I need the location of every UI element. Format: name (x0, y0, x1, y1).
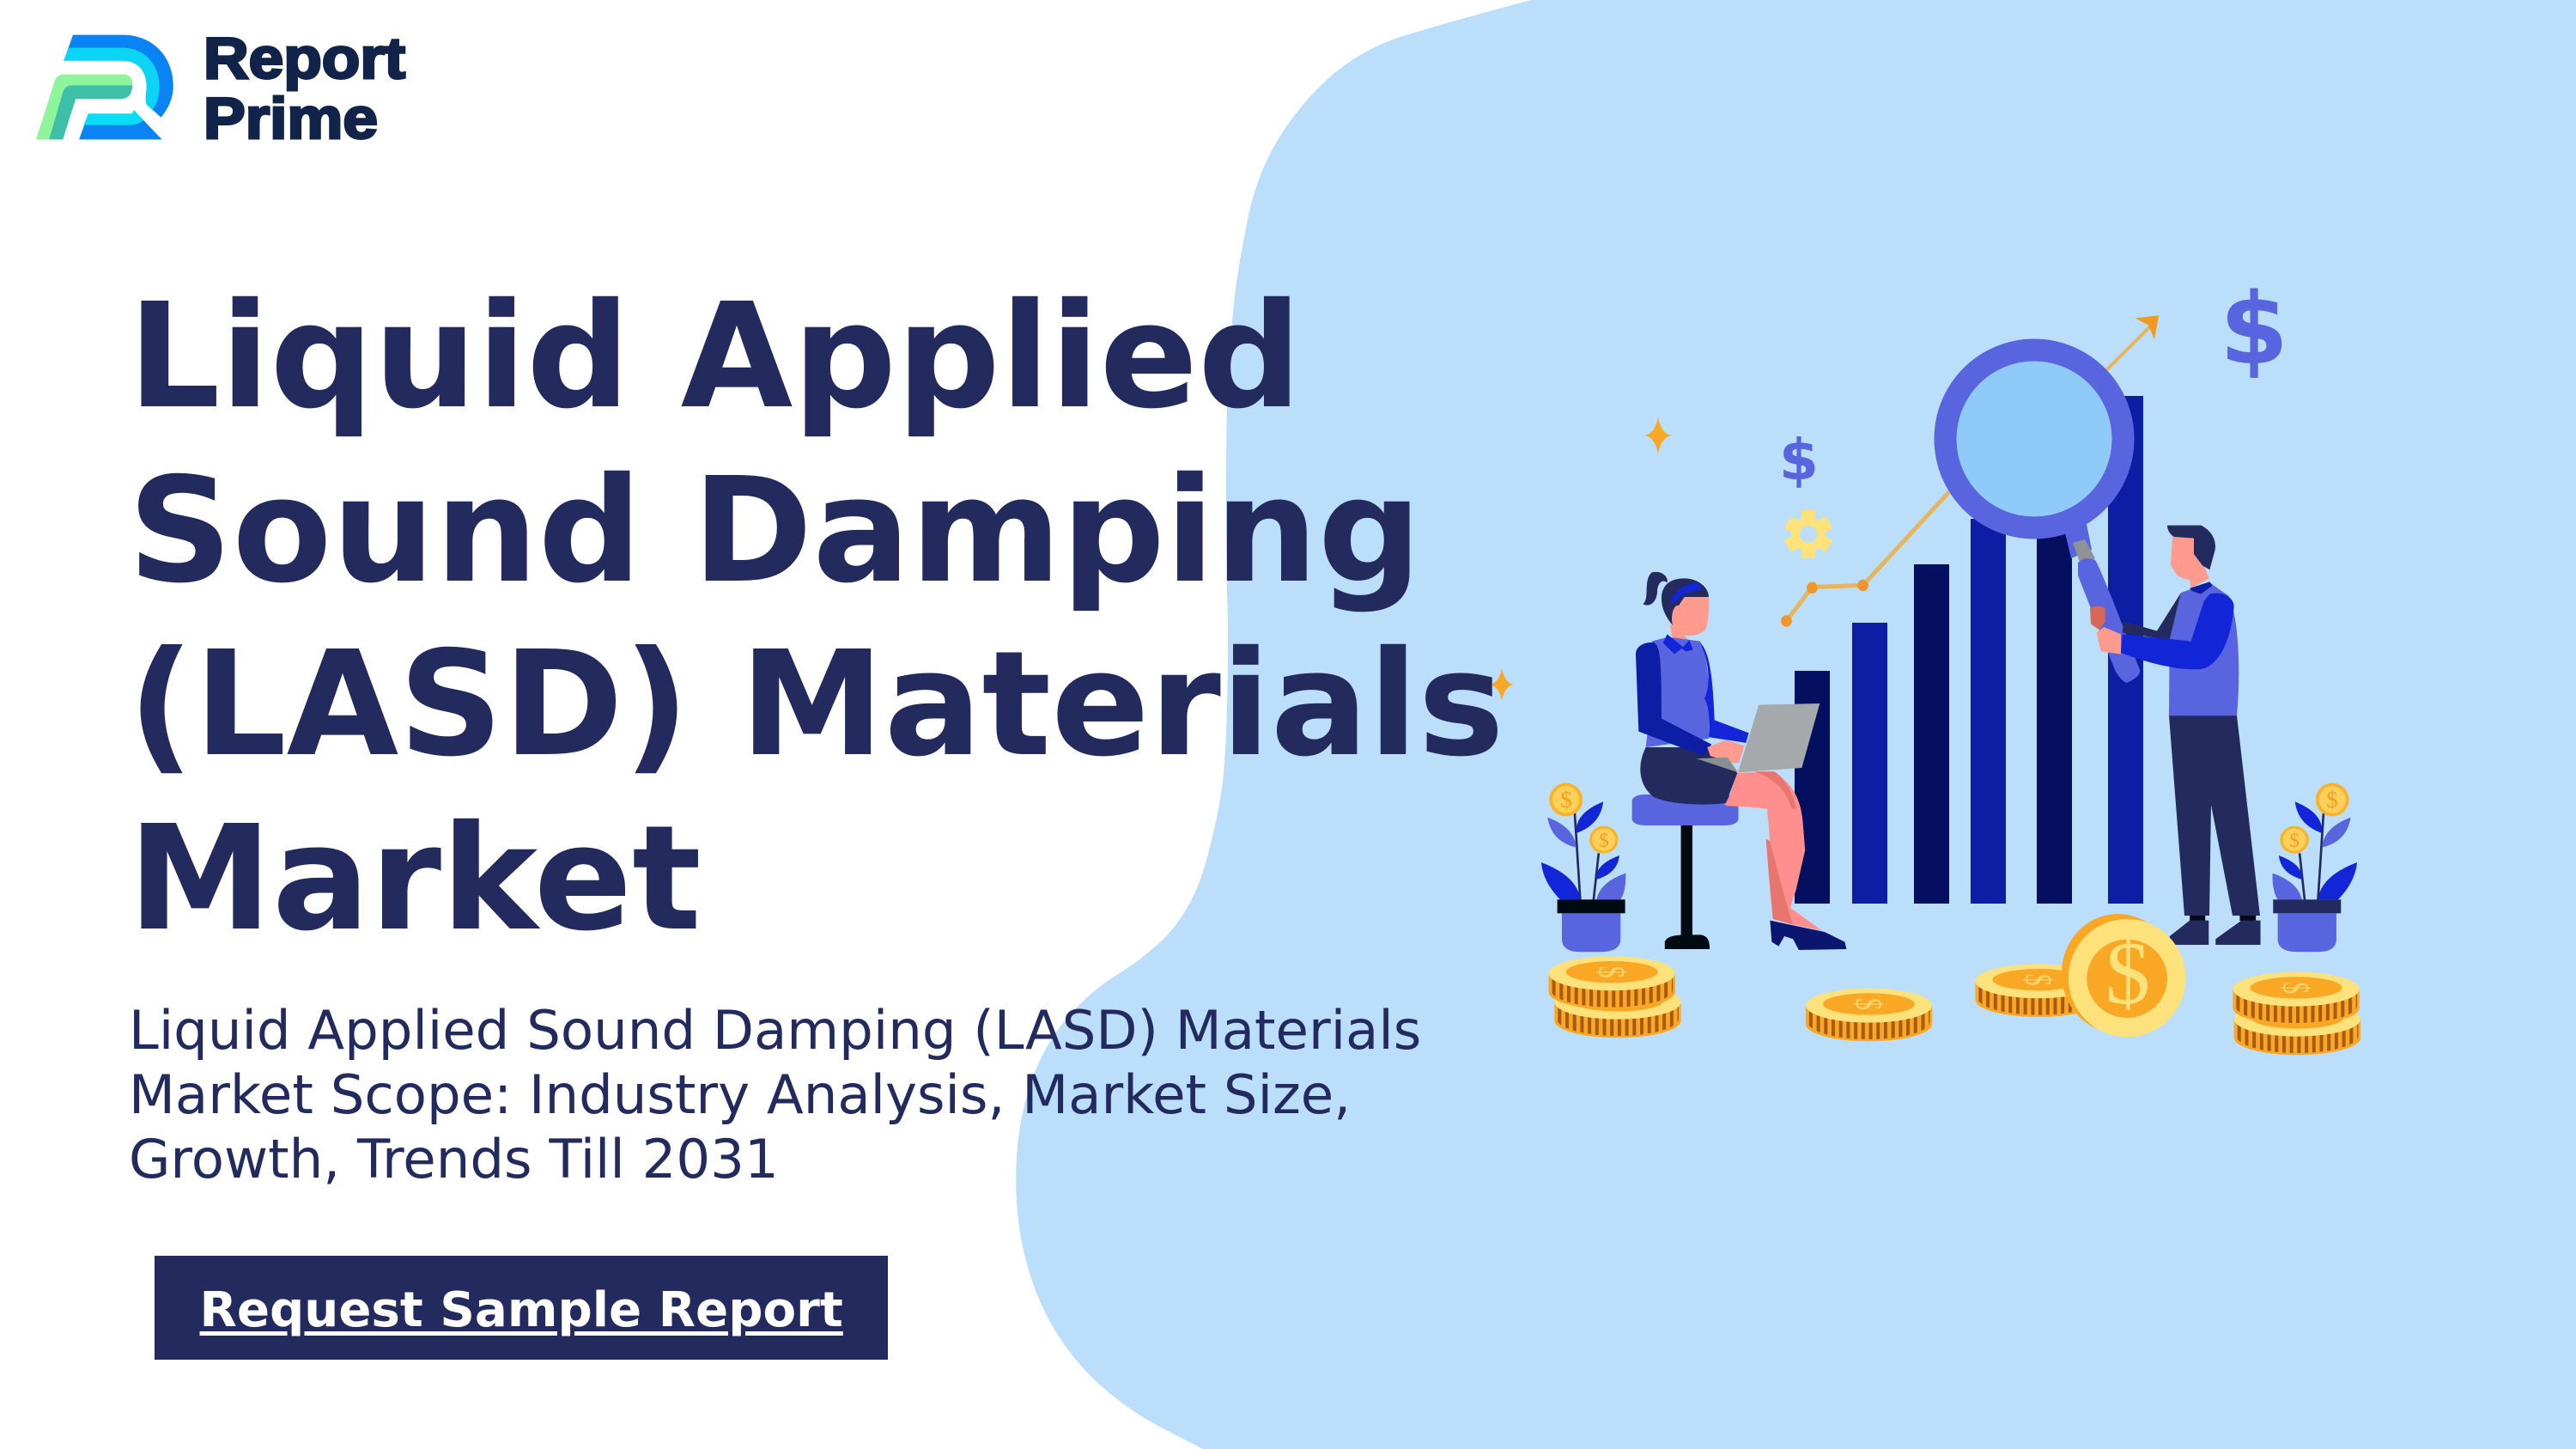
magnifying glass (1934, 338, 2140, 683)
feet (2170, 916, 2261, 945)
plant: right: $ (2289, 830, 2300, 851)
logo wordmark (204, 26, 405, 151)
subtitle: Market Scope: Industry Analysis, Market Size, (129, 1063, 1351, 1126)
title: (LASD) Materials (128, 619, 1504, 788)
title: Market (128, 794, 702, 963)
large coin (2062, 914, 2185, 1037)
trend line with arrow (1781, 315, 2159, 627)
title (128, 271, 1504, 963)
large coin: $ (2105, 922, 2150, 1023)
gear icon (1784, 510, 1832, 558)
logo wordmark: Prime (204, 86, 378, 151)
coin stacks: $ (1848, 998, 1890, 1010)
logo wordmark: Report (204, 26, 405, 91)
plant: left: $ (1560, 787, 1572, 813)
person: woman on stool (1632, 572, 1846, 950)
button: request sample report (155, 1256, 888, 1360)
dollar signs: $ (1779, 427, 1819, 493)
logo mark (36, 35, 173, 139)
button: request sample report: Request Sample Report (199, 1282, 843, 1338)
title: Sound Damping (128, 446, 1422, 615)
subtitle (129, 999, 1421, 1190)
upper body (1636, 572, 1820, 809)
dollar signs: $ (2220, 272, 2288, 387)
plant: right: $ (2326, 787, 2338, 813)
background blob (1016, 0, 2576, 1449)
stool (1632, 795, 1739, 949)
plant: left: $ (1599, 830, 1609, 851)
coin stacks: $ (2275, 982, 2317, 994)
person: man holding magnifier (2090, 526, 2261, 945)
coin stacks (1549, 956, 2360, 1055)
plant: left (1541, 783, 1625, 952)
legs (1724, 771, 1846, 950)
bar chart (1795, 396, 2143, 904)
coin stacks: $ (2018, 974, 2060, 986)
title: Liquid Applied (128, 271, 1302, 441)
decorative stars (1491, 417, 1671, 701)
subtitle: Growth, Trends Till 2031 (129, 1128, 779, 1190)
dollar signs (1779, 272, 2288, 493)
coin stacks: $ (1591, 966, 1633, 978)
subtitle: Liquid Applied Sound Damping (LASD) Materials (129, 999, 1421, 1062)
plant: right (2273, 783, 2357, 952)
